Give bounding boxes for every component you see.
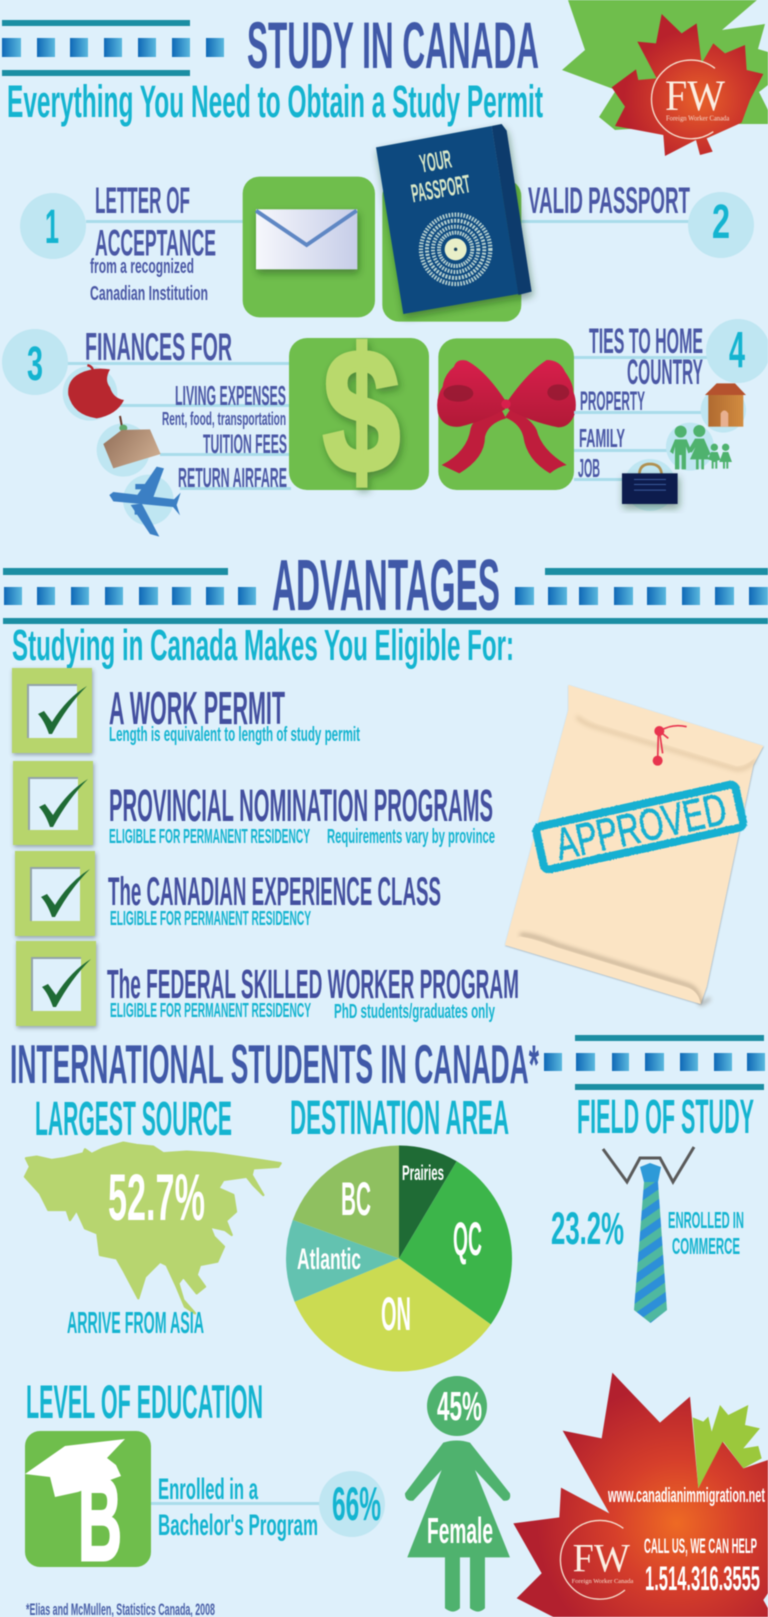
icon: graduation b: [25, 1431, 151, 1586]
icon: apple: [63, 365, 124, 421]
logo: maple leaves top right: [562, 0, 768, 156]
requirement 3: finances: [2, 326, 291, 493]
label: ties to home country: PROPERTY: [580, 386, 645, 416]
advantage 1: work permit: [12, 668, 360, 753]
students heading: [10, 1033, 765, 1095]
icon: family: [666, 423, 732, 471]
label: ties to home country: JOB: [578, 453, 600, 483]
text: LIVING EXPENSES: [175, 380, 286, 411]
logo: maple leaves top right: Foreign Worker Canada: [666, 114, 729, 122]
icon: dollar tile: [289, 314, 429, 510]
label: letter of acceptance: LETTER OF: [95, 179, 190, 221]
icons: house, family and briefcase: [622, 383, 746, 511]
icon: tie: [603, 1147, 694, 1323]
contact maple leaf: FW: [573, 1536, 630, 1581]
advantage 4: federal skilled worker program: [16, 941, 519, 1026]
stat circle 66%: 66%: [332, 1477, 381, 1530]
female figure: Female: [427, 1510, 493, 1551]
level of education panel: [25, 1375, 385, 1586]
advantage 1: work permit: Length is equivalent to length of study permit: [109, 724, 360, 746]
approved envelope: [505, 685, 763, 1004]
field of study panel: [551, 1091, 754, 1323]
map of asia: [25, 1143, 281, 1313]
field of study panel: 23.2%: [551, 1203, 624, 1254]
text: RETURN AIRFARE: [178, 462, 287, 493]
level of education panel: Bachelor's Program: [158, 1509, 318, 1542]
female figure: [405, 1376, 510, 1612]
advantage 3: canadian experience class: ELIGIBLE FOR PERMANENT RESIDENCY: [110, 908, 311, 930]
number circle 2: [688, 192, 754, 258]
number circle 2: 2: [712, 196, 730, 249]
icon: dollar tile: $: [323, 314, 400, 510]
requirement 1: letter of acceptance: [20, 179, 246, 305]
label: letter of acceptance: from a recognized: [90, 256, 194, 278]
icon: passport tile: PASSPORT: [409, 170, 473, 208]
icon: checkbox: [12, 668, 92, 753]
number circle 4: 4: [729, 321, 745, 378]
label: finances for: FINANCES FOR: [85, 326, 232, 369]
number circle 1: [20, 193, 86, 259]
logo: maple leaves top right: FW: [665, 72, 725, 120]
text: TUITION FEES: [203, 429, 287, 459]
icon: passport tile: [376, 124, 532, 322]
advantage 2: provincial nomination programs: ELIGIBLE FOR PERMANENT RESIDENCY: [109, 826, 310, 848]
label: ties to home country: [578, 321, 703, 483]
requirement 1: letter of acceptance: ACCEPTANCE: [95, 222, 216, 264]
pie chart: Prairies: [402, 1161, 444, 1185]
number circle 1: 1: [45, 201, 59, 254]
label: letter of acceptance: [90, 179, 216, 305]
advantage 3: canadian experience class: [15, 851, 441, 936]
icon: house: [701, 383, 746, 433]
text: DESTINATION AREA: [290, 1092, 509, 1145]
stat circle 66%: [319, 1471, 385, 1537]
string button: [653, 726, 687, 766]
destination area panel: [286, 1092, 512, 1371]
icon: bow tile: [437, 338, 576, 490]
advantage 4: federal skilled worker program: ELIGIBLE FOR PERMANENT RESIDENCY: [110, 1000, 311, 1022]
advantages heading: ADVANTAGES: [272, 546, 500, 626]
number circle 3: [2, 329, 68, 395]
number circle 4: [706, 319, 768, 383]
pie chart: ON: [381, 1287, 411, 1340]
advantage 1: work permit: A WORK PERMIT: [109, 682, 285, 734]
contact maple leaf: [513, 1373, 768, 1617]
number circle 3: 3: [27, 338, 43, 391]
largest source panel: ARRIVE FROM ASIA: [67, 1305, 204, 1340]
level of education panel: LEVEL OF EDUCATION: [26, 1375, 263, 1428]
icon: checkbox: [16, 941, 96, 1026]
largest source panel: 52.7%: [108, 1160, 205, 1234]
pie chart: BC: [341, 1172, 371, 1225]
pie chart: Atlantic: [297, 1243, 361, 1276]
label: finances for: [85, 326, 287, 493]
icon: envelope tile: [243, 177, 375, 317]
advantage 4: federal skilled worker program: PhD students/graduates only: [334, 1001, 496, 1023]
header rule and squares: [2, 20, 224, 76]
icon: passport tile: YOUR: [418, 145, 454, 179]
icon: plane: [109, 467, 181, 537]
label: ties to home country: FAMILY: [579, 423, 625, 453]
rules and squares: [544, 1035, 765, 1090]
rules and squares: [3, 568, 768, 624]
contact maple leaf: Foreign Worker Canada: [572, 1578, 634, 1585]
level of education panel: Enrolled in a: [158, 1473, 258, 1506]
icon: briefcase: [622, 459, 678, 511]
pie chart: QC: [453, 1212, 482, 1265]
icon: checkbox: [15, 851, 95, 936]
requirement 4: ties to home country: [574, 319, 768, 483]
label: finances for: Rent, food, transportation: [162, 409, 286, 429]
icon: graduation b: B: [78, 1454, 122, 1586]
requirement 2: valid passport: [520, 179, 754, 258]
advantage 2: provincial nomination programs: Requirements vary by province: [327, 826, 495, 848]
icons: envelope and passport: [243, 124, 532, 322]
advantages heading: [3, 546, 768, 670]
female figure: 45%: [437, 1383, 482, 1429]
pie chart: [286, 1145, 512, 1371]
header: [2, 8, 543, 127]
label: letter of acceptance: Canadian Institution: [90, 283, 208, 305]
icon: checkbox: [13, 761, 93, 845]
icons: apple, cake box and plane: [63, 365, 181, 537]
largest source panel: [25, 1093, 281, 1340]
icon: graduation box: [97, 416, 161, 477]
largest source panel: LARGEST SOURCE: [35, 1093, 232, 1146]
advantage 2: provincial nomination programs: [13, 761, 495, 848]
